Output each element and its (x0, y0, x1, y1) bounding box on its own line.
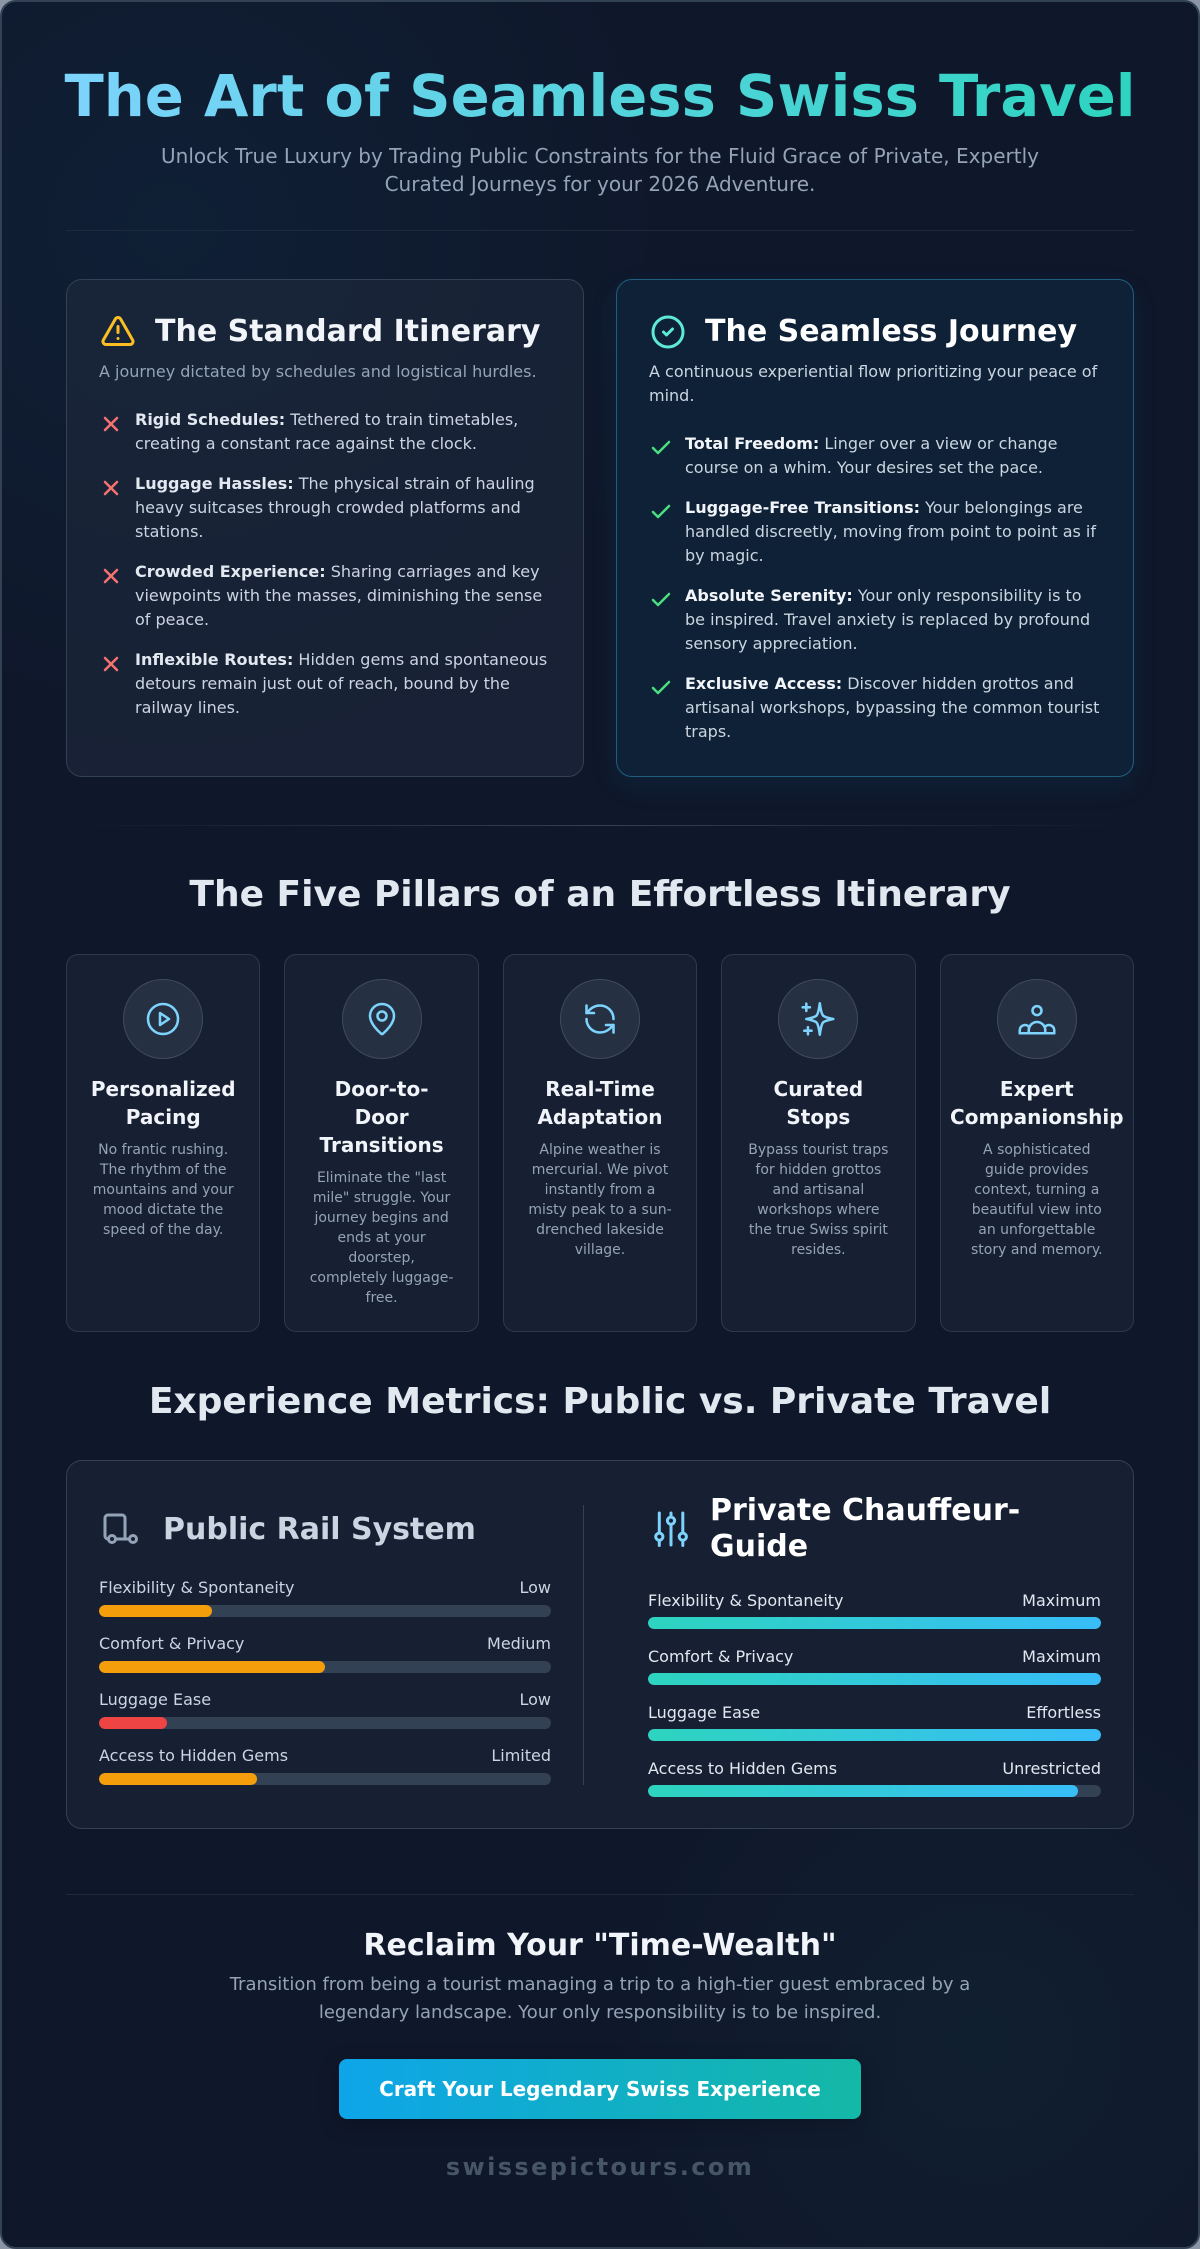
metric: comfort public (99, 1634, 551, 1673)
item: absolute serenity: sensory appreciation. (685, 634, 858, 653)
pillar description: mercurial. We pivot (532, 1162, 668, 1178)
icon: play circle (123, 979, 203, 1059)
heading: public rail system: Public Rail System (163, 1512, 476, 1547)
item: exclusive access: artisanal workshops, bypassing the common tourist (685, 698, 1099, 717)
icon: map pin (342, 979, 422, 1059)
pillar description: journey begins and (314, 1210, 449, 1226)
metric: luggage public: Luggage Ease (99, 1690, 211, 1709)
pillar description: free. (366, 1290, 398, 1306)
metric: hidden gems public: Limited (491, 1746, 551, 1765)
item: luggage hassles: heavy suitcases through crowded platforms and (135, 498, 521, 517)
metric: comfort private (648, 1647, 1101, 1685)
metric: hidden gems private: Unrestricted (1002, 1759, 1101, 1778)
pillar description: Bypass tourist traps (748, 1142, 888, 1158)
item: exclusive access: Exclusive Access: Discover hidden grottos and (685, 674, 1074, 693)
pillar description: village. (575, 1242, 625, 1258)
metric: flexibility public: Low (519, 1578, 551, 1597)
metric: comfort private: Maximum (1022, 1647, 1101, 1666)
item: exclusive access (652, 674, 1099, 741)
pillar description: misty peak to a sun- (528, 1202, 672, 1218)
item: luggage-free transitions: Luggage-Free Transitions: Your belongings are (685, 498, 1083, 517)
item: absolute serenity: Absolute Serenity: Your only responsibility is to (685, 586, 1082, 605)
icon: sliders (654, 1512, 688, 1547)
pillar description: drenched lakeside (536, 1222, 664, 1238)
pillar description: mountains and your (93, 1182, 234, 1198)
icon: rail (104, 1514, 138, 1544)
item: absolute serenity (652, 586, 1090, 653)
standard intro text: A journey dictated by schedules and logistical hurdles. (99, 362, 537, 381)
pillar description (748, 1142, 888, 1258)
item: rigid schedules: Rigid Schedules: Tethered to train timetables, (135, 410, 518, 429)
pillar description: Alpine weather is (539, 1142, 661, 1158)
heading: standard itinerary: The Standard Itinerary (155, 314, 540, 349)
pillar description (310, 1170, 453, 1306)
pillar description: story and memory. (971, 1242, 1103, 1258)
item: inflexible routes: Inflexible Routes: Hidden gems and spontaneous (135, 650, 547, 669)
item: rigid schedules (104, 410, 518, 453)
icon: guide person (997, 979, 1077, 1059)
item: exclusive access: traps. (685, 722, 731, 741)
item: total freedom: Total Freedom: Linger over a view or change (685, 434, 1057, 453)
panel: metrics (66, 1460, 1134, 1829)
pillar description: beautiful view into (972, 1202, 1102, 1218)
icon: circle check (652, 316, 684, 348)
closing text (230, 1974, 970, 2023)
pillar description: workshops where (757, 1202, 880, 1218)
metric: luggage private: Luggage Ease (648, 1703, 760, 1722)
pillar title: Companionship (950, 1105, 1124, 1129)
pillar title: Expert (1000, 1077, 1074, 1101)
pillar description: and artisanal (773, 1182, 864, 1198)
pillar description: doorstep, (348, 1250, 415, 1266)
pillar description: context, turning a (974, 1182, 1099, 1198)
metric: comfort public: Comfort & Privacy (99, 1634, 244, 1653)
pillar title: Personalized (91, 1077, 236, 1101)
metric: luggage public (99, 1690, 551, 1729)
seamless intro text (649, 362, 1098, 405)
metric: flexibility private: Flexibility & Spontaneity (648, 1591, 844, 1610)
pillar title: Stops (786, 1105, 850, 1129)
pillar description: guide provides (985, 1162, 1089, 1178)
pillar description (971, 1142, 1103, 1258)
panel: real-time adaptation (503, 954, 697, 1332)
button: call to action: Craft Your Legendary Swiss Experience (379, 2077, 821, 2101)
metric: flexibility public (99, 1578, 551, 1617)
pillar description: resides. (791, 1242, 846, 1258)
item: crowded experience: viewpoints with the masses, diminishing the sense (135, 586, 542, 605)
metric: flexibility private (648, 1591, 1101, 1629)
item: absolute serenity: be inspired. Travel anxiety is replaced by profound (685, 610, 1090, 629)
metric: luggage private: Effortless (1026, 1703, 1101, 1722)
metric: comfort private: Comfort & Privacy (648, 1647, 793, 1666)
button: call to action (339, 2059, 861, 2119)
item: inflexible routes: railway lines. (135, 698, 240, 717)
pillar title: Door-to- (335, 1077, 429, 1101)
item: luggage hassles (104, 474, 535, 541)
pillar title (91, 1077, 236, 1129)
heading: experience metrics: Experience Metrics: Public vs. Private Travel (149, 1381, 1051, 1422)
item: total freedom: course on a whim. Your desires set the pace. (685, 458, 1043, 477)
metric: comfort public: Medium (487, 1634, 551, 1653)
pillar description: an unforgettable (978, 1222, 1095, 1238)
pillar title: Real-Time (545, 1077, 655, 1101)
pillar description: mile" struggle. Your (313, 1190, 450, 1206)
pillar description: completely luggage- (310, 1270, 453, 1286)
metric: hidden gems private: Access to Hidden Gems (648, 1759, 837, 1778)
pillar description: ends at your (338, 1230, 426, 1246)
panel: personalized pacing (66, 954, 260, 1332)
metric: hidden gems private (648, 1759, 1101, 1797)
metric: hidden gems public (99, 1746, 551, 1785)
heading: private chauffeur-guide: Private Chauffeur- (710, 1493, 1020, 1528)
icon: refresh (560, 979, 640, 1059)
item: crowded experience (104, 562, 542, 629)
item: luggage-free transitions (652, 498, 1096, 565)
title: The Art of Seamless Swiss Travel (64, 63, 1136, 130)
pillar title (950, 1077, 1124, 1129)
item: luggage-free transitions: by magic. (685, 546, 764, 565)
closing text: Transition from being a tourist managing a trip to a high-tier guest embraced by a (230, 1974, 970, 1995)
item: luggage hassles: Luggage Hassles: The physical strain of hauling (135, 474, 535, 493)
pillar description (93, 1142, 234, 1238)
heading: five pillars: The Five Pillars of an Effortless Itinerary (189, 874, 1011, 915)
seamless intro text: A continuous experiential flow prioritizing your peace of (649, 362, 1097, 381)
pillar title: Adaptation (537, 1105, 663, 1129)
metric: luggage private (648, 1703, 1101, 1741)
metric: flexibility private: Maximum (1022, 1591, 1101, 1610)
subtitle: Unlock True Luxury by Trading Public Constraints for the Fluid Grace of Private, Expertly (161, 144, 1039, 168)
pillar description: speed of the day. (103, 1222, 223, 1238)
pillar title: Pacing (126, 1105, 201, 1129)
item: crowded experience: of peace. (135, 610, 209, 629)
pillar description: No frantic rushing. (98, 1142, 228, 1158)
item: inflexible routes (104, 650, 547, 717)
heading: private chauffeur-guide: Guide (710, 1529, 808, 1564)
pillar title (320, 1077, 444, 1157)
pillar description: The rhythm of the (100, 1162, 226, 1178)
item: inflexible routes: detours remain just out of reach, bound by the (135, 674, 510, 693)
pillar title (774, 1077, 863, 1129)
closing text: legendary landscape. Your only responsibility is to be inspired. (319, 2002, 881, 2023)
heading: reclaim your time-wealth: Reclaim Your "Time-Wealth" (363, 1928, 837, 1963)
panel: curated stops (721, 954, 916, 1332)
pillar title (537, 1077, 663, 1129)
icon: warning triangle (101, 316, 134, 346)
pillar description: Eliminate the "last (317, 1170, 446, 1186)
panel: the seamless journey (616, 279, 1134, 777)
pillar description: the true Swiss spirit (749, 1222, 888, 1238)
metric: flexibility public: Flexibility & Spontaneity (99, 1578, 294, 1597)
item: total freedom (652, 434, 1057, 477)
heading: private chauffeur-guide (710, 1493, 1020, 1564)
pillar description: A sophisticated (983, 1142, 1091, 1158)
metric: luggage public: Low (519, 1690, 551, 1709)
subtitle: Curated Journeys for your 2026 Adventure. (385, 172, 815, 196)
pillar title: Door (355, 1105, 409, 1129)
pillar description: mood dictate the (103, 1202, 223, 1218)
pillar description (528, 1142, 672, 1258)
pillar title: Curated (774, 1077, 863, 1101)
item: crowded experience: Crowded Experience: Sharing carriages and key (135, 562, 540, 581)
panel: expert companionship (940, 954, 1134, 1332)
item: rigid schedules: creating a constant race against the clock. (135, 434, 477, 453)
subtitle (161, 144, 1039, 196)
item: luggage hassles: stations. (135, 522, 203, 541)
pillar title: Transitions (320, 1133, 444, 1157)
footer: website: swissepictours.com (446, 2153, 754, 2181)
pillar description: instantly from a (545, 1182, 655, 1198)
metric: hidden gems public: Access to Hidden Gems (99, 1746, 288, 1765)
seamless intro text: mind. (649, 386, 694, 405)
pillar description: for hidden grottos (755, 1162, 881, 1178)
item: luggage-free transitions: handled discreetly, moving from point to point as if (685, 522, 1096, 541)
panel: door-to-door transitions (284, 954, 479, 1332)
panel: the standard itinerary (66, 279, 584, 777)
icon: sparkles (778, 979, 858, 1059)
heading: seamless journey: The Seamless Journey (705, 314, 1077, 349)
